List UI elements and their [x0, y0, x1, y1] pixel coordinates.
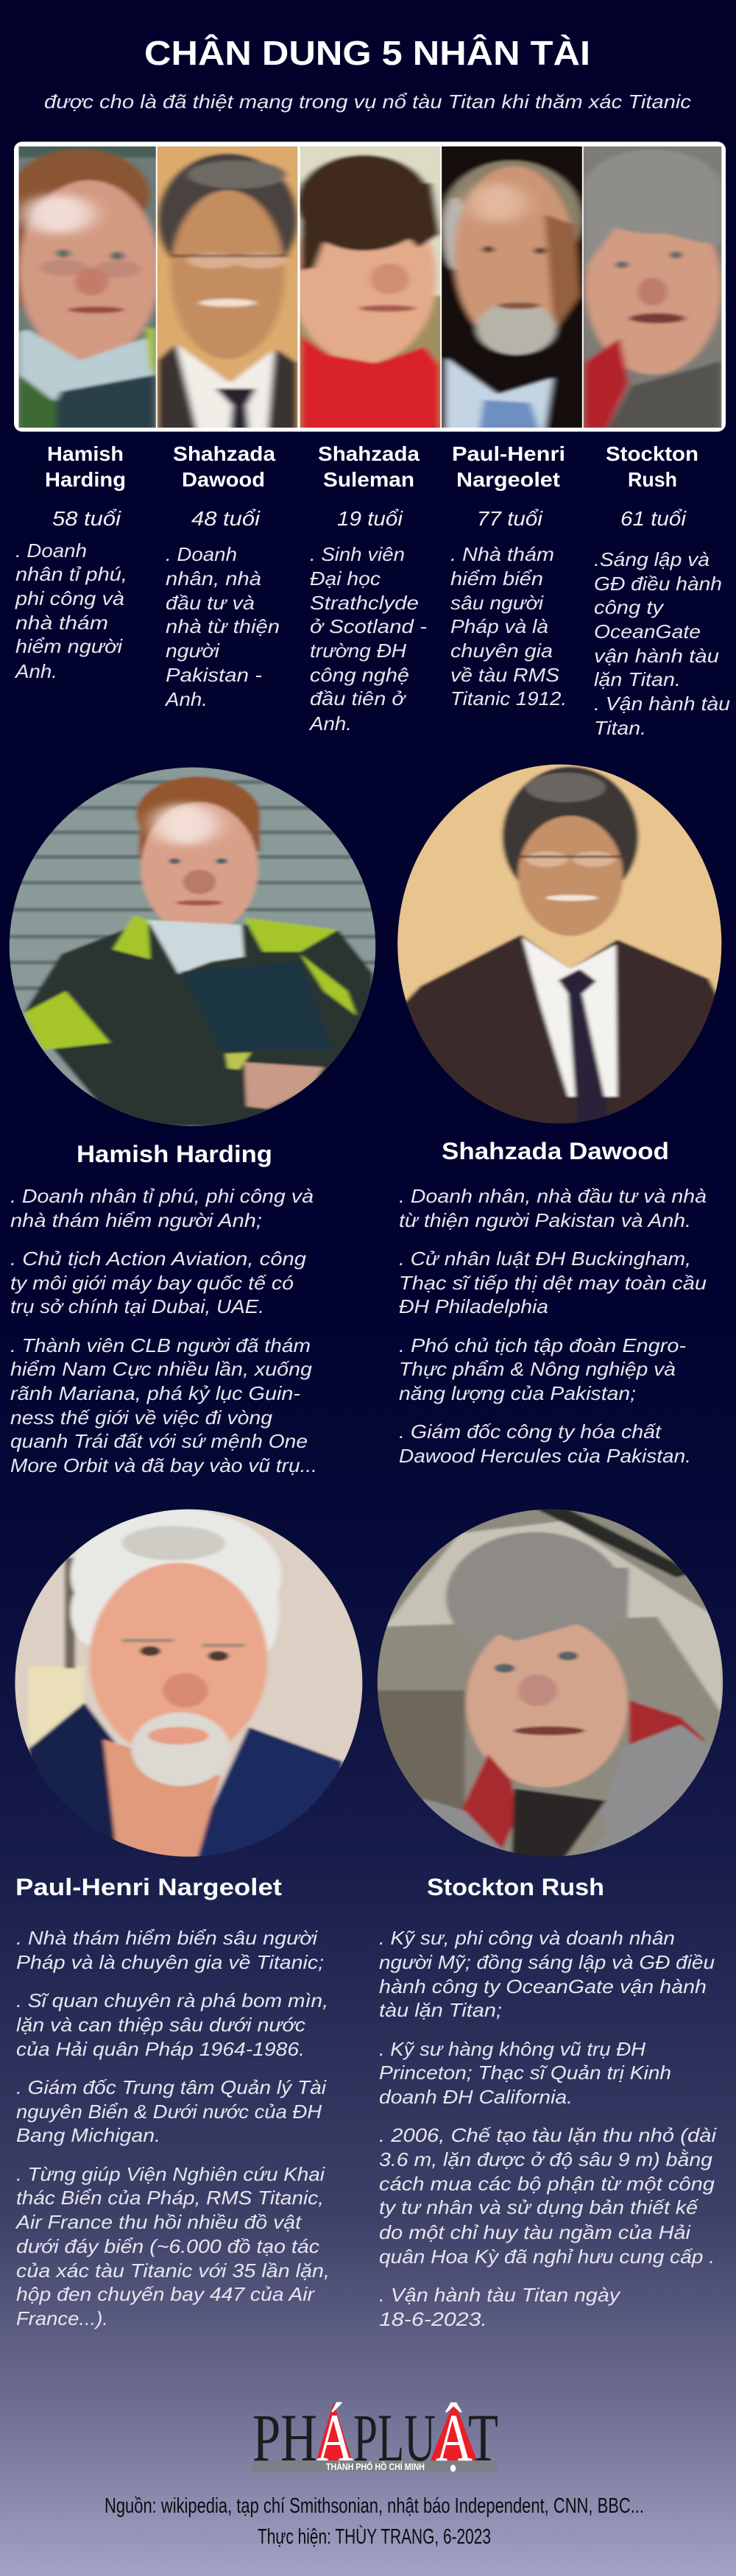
text block: Stockton Rush details: người Mỹ; đồng sáng lập và GĐ điều	[379, 1951, 715, 1973]
profile: Stockton Rush: công ty	[594, 596, 665, 618]
profile: Hamish Harding: nhà thám	[15, 612, 108, 634]
logo: Pháp Luật: PH	[252, 2400, 317, 2475]
profile: Shahzada Dawood: nhân, nhà	[166, 567, 261, 590]
text block: Stockton Rush details: 18-6-2023.	[379, 2308, 487, 2330]
text block: Stockton Rush details: quân Hoa Kỳ đã nghỉ hưu cung cấp .	[379, 2246, 715, 2268]
text block: Shahzada Dawood details: từ thiện người Pakistan và Anh.	[399, 1209, 691, 1231]
profile: Hamish Harding	[14, 442, 127, 682]
text block: Stockton Rush details: Princeton; Thạc sĩ Quản trị Kinh	[379, 2062, 671, 2084]
logo: Pháp Luật: THÀNH PHỐ HỒ CHÍ MINH	[326, 2461, 425, 2472]
profile: Shahzada Suleman: đầu tiên ở	[310, 687, 407, 710]
credit line: Thực hiện: THÙY TRANG, 6-2023	[258, 2524, 491, 2549]
profile: Shahzada Suleman: Suleman	[323, 468, 414, 491]
profile: Shahzada Suleman: Anh.	[308, 712, 352, 735]
profile: Paul-Henri Nargeolet: . Nhà thám	[450, 543, 554, 565]
text block: Paul-Henri Nargeolet details: Bang Michigan.	[16, 2124, 160, 2146]
title: CHÂN DUNG 5 NHÂN TÀI	[144, 34, 590, 72]
profile: Shahzada Suleman: 19 tuổi	[337, 507, 403, 530]
text block: Stockton Rush details: cách mua các bộ phận từ một công	[379, 2173, 715, 2195]
logo: Pháp Luật	[252, 2400, 498, 2475]
text block: Shahzada Dawood details: . Giám đốc công ty hóa chất	[399, 1420, 662, 1443]
profile: Shahzada Suleman: trường ĐH	[310, 640, 406, 662]
profile: Hamish Harding: hiểm người	[15, 635, 123, 657]
text block: Shahzada Dawood details: Thạc sĩ tiếp thị dệt may toàn cầu	[399, 1272, 707, 1294]
text block: Paul-Henri Nargeolet details: France...).	[16, 2307, 108, 2329]
profile: Shahzada Suleman: Shahzada	[318, 442, 420, 465]
heading: Hamish Harding: Hamish Harding	[77, 1141, 272, 1167]
profile: Paul-Henri Nargeolet: Paul-Henri	[452, 442, 565, 465]
profile: Shahzada Suleman	[308, 442, 427, 735]
profile: Paul-Henri Nargeolet	[450, 442, 567, 710]
portrait: Shahzada Dawood	[158, 146, 297, 428]
text block: Paul-Henri Nargeolet details: . Sĩ quan chuyên rà phá bom mìn,	[16, 1989, 328, 2011]
profile: Shahzada Dawood: Shahzada	[173, 442, 275, 465]
text block: Hamish Harding details	[10, 1185, 317, 1476]
heading: Paul-Henri Nargeolet: Paul-Henri Nargeolet	[15, 1874, 282, 1900]
profile: Paul-Henri Nargeolet: chuyên gia	[450, 640, 553, 662]
logo: Pháp Luật: PLU	[353, 2400, 436, 2475]
profile: Shahzada Suleman: Đại học	[310, 567, 381, 590]
profile: Paul-Henri Nargeolet: Nargeolet	[456, 468, 560, 491]
profile: Shahzada Suleman: Strathclyde	[310, 592, 419, 614]
profile: Stockton Rush: Titan.	[594, 717, 646, 739]
profile: Paul-Henri Nargeolet: hiểm biển	[450, 567, 543, 590]
portrait oval: Hamish Harding	[0, 763, 385, 1131]
profile: Hamish Harding: . Doanh	[15, 539, 87, 562]
profile: Shahzada Dawood: Pakistan -	[166, 664, 262, 686]
profile: Stockton Rush: . Vận hành tàu	[594, 693, 730, 715]
logo: Pháp Luật: Ậ	[436, 2400, 473, 2475]
text block: Hamish Harding details: rãnh Mariana, phá kỷ lục Guin-	[10, 1382, 300, 1404]
portrait oval: Shahzada Dawood	[389, 760, 728, 1128]
profile: Shahzada Suleman: ở Scotland -	[310, 615, 427, 637]
text block: Shahzada Dawood details: . Cử nhân luật ĐH Buckingham,	[399, 1248, 691, 1270]
profile: Paul-Henri Nargeolet: về tàu RMS	[450, 664, 560, 686]
profile: Stockton Rush	[594, 442, 730, 739]
text block: Shahzada Dawood details	[399, 1185, 707, 1467]
profile: Shahzada Dawood	[164, 442, 280, 710]
profile: Hamish Harding: Harding	[45, 468, 126, 491]
text block: Stockton Rush details: . Kỹ sư hàng không vũ trụ ĐH	[379, 2038, 645, 2060]
profile: Shahzada Dawood: 48 tuổi	[191, 507, 261, 530]
text block: Hamish Harding details: quanh Trái đất với sứ mệnh One	[10, 1430, 308, 1452]
text block: Paul-Henri Nargeolet details	[15, 1927, 330, 2329]
text block: Stockton Rush details: . Kỹ sư, phi công và doanh nhân	[379, 1927, 675, 1949]
profile: Paul-Henri Nargeolet: Titanic 1912.	[450, 687, 567, 710]
text block: Shahzada Dawood details: năng lượng của Pakistan;	[399, 1382, 636, 1404]
portrait oval: Paul-Henri Nargeolet	[10, 1507, 371, 1860]
profile: Shahzada Dawood: người	[166, 640, 220, 662]
profile: Stockton Rush: 61 tuổi	[620, 507, 687, 530]
text block: Stockton Rush details: . Vận hành tàu Titan ngày	[379, 2284, 621, 2306]
profile: Stockton Rush: vận hành tàu	[594, 645, 719, 667]
profile: Hamish Harding: phi công và	[15, 587, 124, 609]
profile: Stockton Rush: lặn Titan.	[594, 668, 681, 690]
profile: Shahzada Dawood: . Doanh	[166, 543, 237, 565]
text block: Hamish Harding details: ty môi giới máy bay quốc tế có	[10, 1272, 294, 1294]
text block: Stockton Rush details: ty tư nhân và sử dụng bản thiết kế	[379, 2196, 699, 2218]
text block: Stockton Rush details	[379, 1927, 717, 2330]
profile: Paul-Henri Nargeolet: Pháp và là	[450, 615, 548, 637]
subtitle: được cho là đã thiệt mạng trong vụ nổ tàu Titan khi thăm xác Titanic	[44, 91, 691, 113]
profile: Hamish Harding: Hamish	[47, 442, 124, 465]
text block: Paul-Henri Nargeolet details: thác Biển của Pháp, RMS Titanic,	[16, 2187, 324, 2209]
portrait oval: Stockton Rush	[371, 1507, 732, 1860]
panel: five short profiles	[14, 442, 730, 739]
photo strip: five portraits	[10, 141, 730, 434]
text block: Hamish Harding details: hiểm Nam Cực nhiều lần, xuống	[10, 1358, 313, 1380]
profile: Shahzada Suleman: công nghệ	[310, 664, 409, 686]
portrait: Shahzada Suleman	[300, 146, 440, 428]
text block: Hamish Harding details: nhà thám hiểm người Anh;	[10, 1209, 262, 1231]
text block: Paul-Henri Nargeolet details: . Từng giúp Viện Nghiên cứu Khai	[16, 2163, 325, 2185]
text block: Paul-Henri Nargeolet details: . Giám đốc Trung tâm Quản lý Tài	[16, 2076, 327, 2098]
text block: Stockton Rush details: tàu lặn Titan;	[379, 1999, 502, 2021]
profile: Paul-Henri Nargeolet: 77 tuổi	[477, 507, 543, 530]
heading: Shahzada Dawood: Shahzada Dawood	[442, 1138, 669, 1164]
text block: Shahzada Dawood details: . Doanh nhân, nhà đầu tư và nhà	[399, 1185, 707, 1207]
text block: Stockton Rush details: doanh ĐH California.	[379, 2086, 573, 2108]
text block: Hamish Harding details: . Thành viên CLB người đã thám	[10, 1334, 311, 1356]
text block: Hamish Harding details: ness thế giới về việc đi vòng	[10, 1406, 273, 1429]
text block: Hamish Harding details: trụ sở chính tại Dubai, UAE.	[10, 1295, 264, 1317]
profile: Stockton Rush: GĐ điều hành	[594, 573, 722, 595]
profile: Stockton Rush: Stockton	[606, 442, 698, 465]
text block: Stockton Rush details: . 2006, Chế tạo tàu lặn thu nhỏ (dài	[379, 2124, 717, 2146]
text block: Paul-Henri Nargeolet details: lặn và can thiệp sâu dưới nước	[16, 2014, 305, 2036]
profile: Stockton Rush: Rush	[628, 468, 677, 491]
heading: Stockton Rush: Stockton Rush	[427, 1874, 604, 1900]
text block: Paul-Henri Nargeolet details: của Hải quân Pháp 1964-1986.	[16, 2038, 305, 2060]
text block: Paul-Henri Nargeolet details: Air France thu hồi nhiều đồ vật	[15, 2211, 302, 2233]
text block: Hamish Harding details: . Doanh nhân tỉ phú, phi công và	[10, 1185, 314, 1207]
text block: Stockton Rush details: hành công ty OceanGate vận hành	[379, 1975, 707, 1998]
profile: Shahzada Dawood: nhà từ thiện	[166, 615, 280, 637]
text block: Shahzada Dawood details: ĐH Philadelphia	[399, 1295, 548, 1317]
text block: Paul-Henri Nargeolet details: hộp đen chuyến bay 447 của Air	[16, 2283, 315, 2305]
portrait: Paul-Henri Nargeolet	[442, 146, 582, 428]
profile: Stockton Rush: OceanGate	[594, 620, 701, 643]
profile: Stockton Rush: .Sáng lập và	[594, 548, 710, 570]
text block: Shahzada Dawood details: Dawood Hercules của Pakistan.	[399, 1445, 691, 1467]
text block: Paul-Henri Nargeolet details: . Nhà thám hiểm biển sâu người	[16, 1927, 318, 1949]
text block: Paul-Henri Nargeolet details: nguyên Biển & Dưới nước của ĐH	[16, 2101, 322, 2123]
logo: Pháp Luật: T	[468, 2400, 498, 2475]
text block: Hamish Harding details: More Orbit và đã bay vào vũ trụ...	[10, 1454, 317, 1476]
profile: Shahzada Dawood: Anh.	[164, 688, 208, 710]
text block: Stockton Rush details: 3.6 m, lặn được ở độ sâu 9 m) bằng	[379, 2148, 713, 2170]
text block: Paul-Henri Nargeolet details: dưới đáy biển (~6.000 đồ tạo tác	[16, 2235, 319, 2257]
text block: Paul-Henri Nargeolet details: của xác tàu Titanic với 35 lần lặn,	[16, 2260, 330, 2282]
profile: Hamish Harding: nhân tỉ phú,	[15, 563, 127, 585]
profile: Hamish Harding: Anh.	[14, 660, 57, 682]
profile: Paul-Henri Nargeolet: sâu người	[450, 592, 544, 614]
profile: Hamish Harding: 58 tuổi	[52, 507, 121, 530]
text block: Shahzada Dawood details: . Phó chủ tịch tập đoàn Engro-	[399, 1334, 686, 1356]
logo: Pháp Luật: Á	[316, 2400, 353, 2475]
text block: Shahzada Dawood details: Thực phẩm & Nông nghiệp và	[399, 1358, 676, 1380]
text block: Paul-Henri Nargeolet details: Pháp và là chuyên gia về Titanic;	[16, 1951, 324, 1973]
portrait: Hamish Harding	[19, 146, 156, 428]
portrait: Stockton Rush	[583, 146, 721, 428]
text block: Stockton Rush details: do một chỉ huy tàu ngầm của Hải	[379, 2221, 691, 2243]
profile: Shahzada Suleman: . Sinh viên	[310, 543, 405, 565]
text block: Hamish Harding details: . Chủ tịch Action Aviation, công	[10, 1248, 307, 1270]
profile: Shahzada Dawood: đầu tư và	[166, 592, 255, 614]
profile: Shahzada Dawood: Dawood	[182, 468, 265, 491]
